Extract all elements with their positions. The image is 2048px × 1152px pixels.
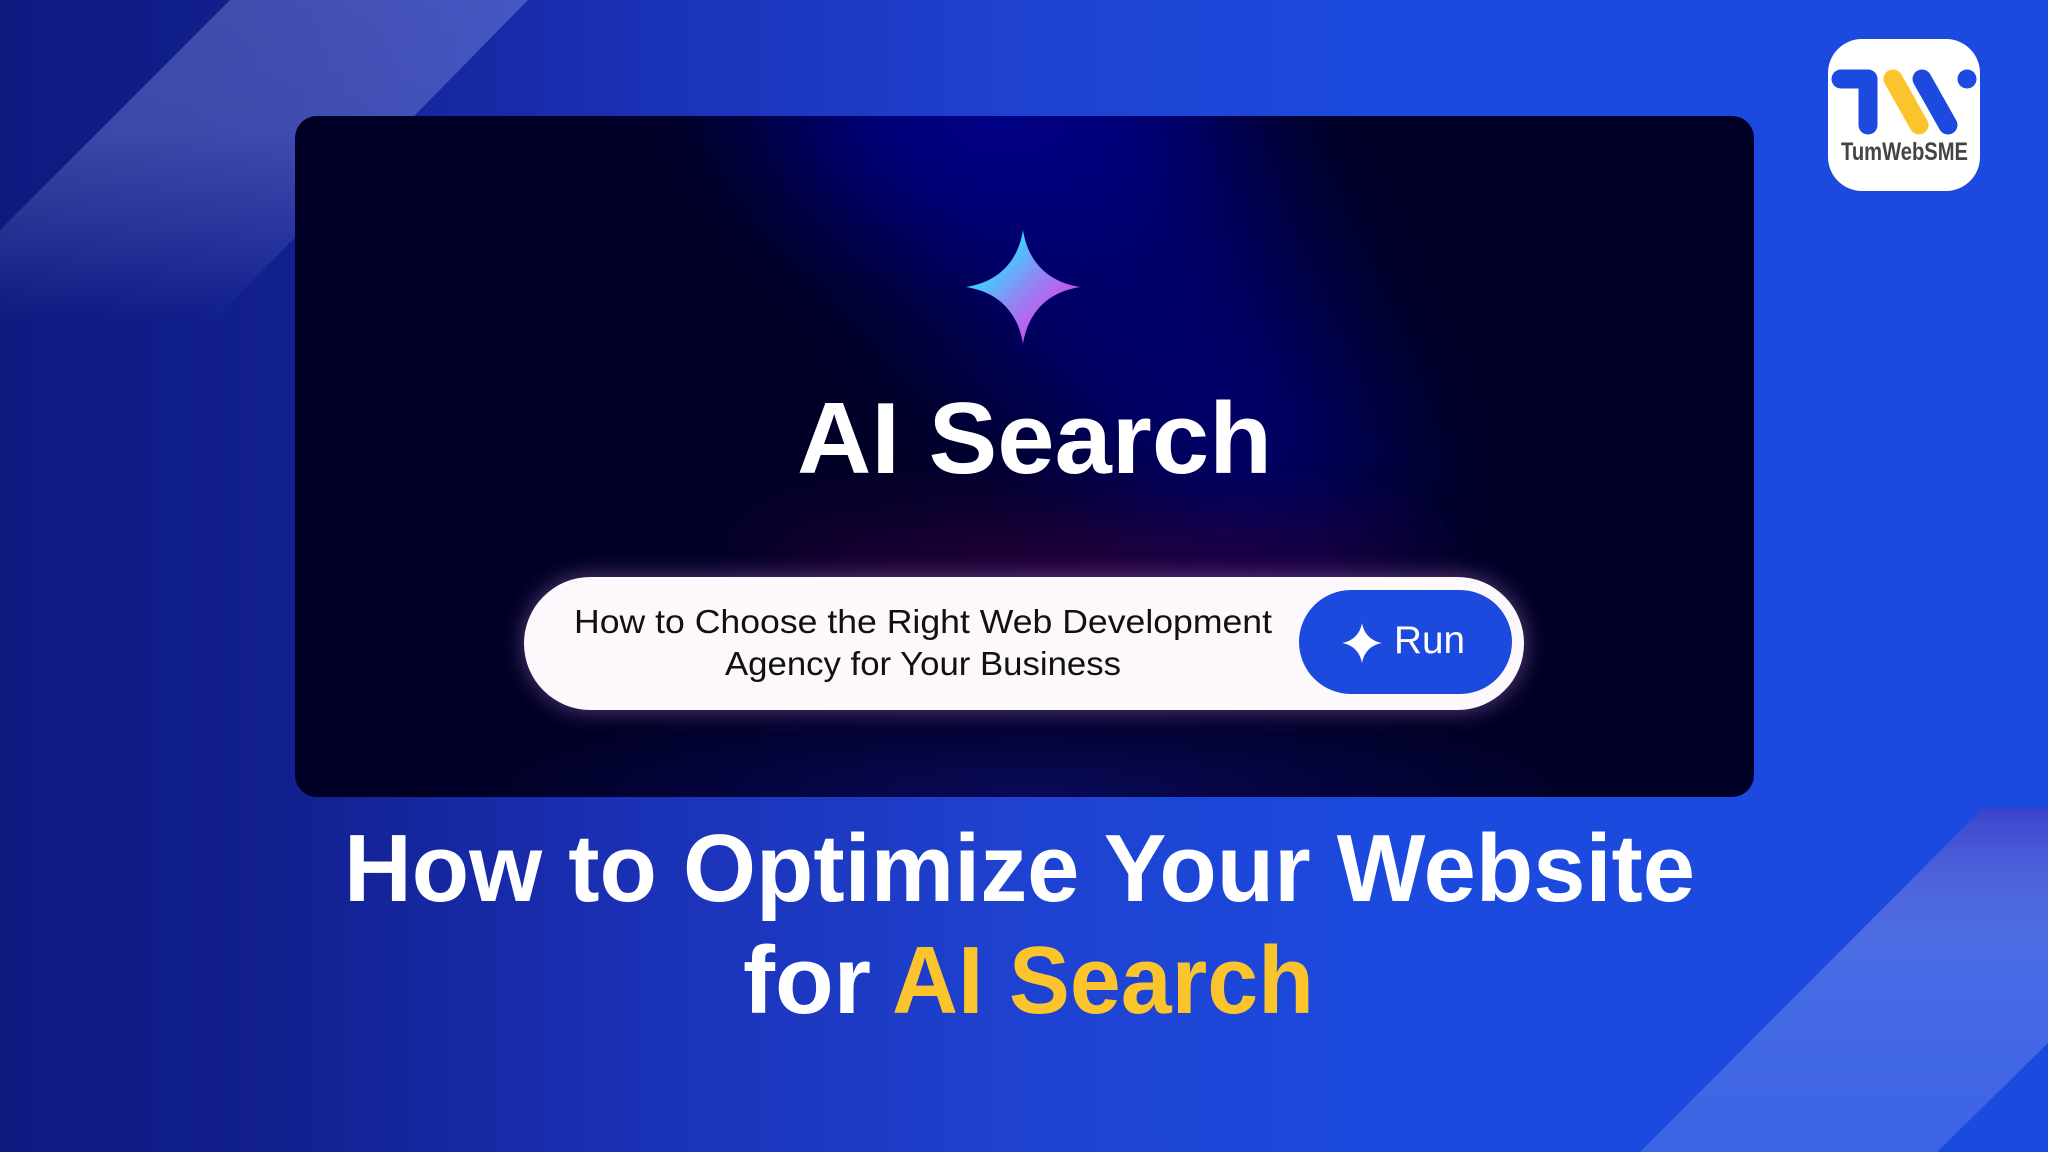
title: for	[743, 927, 871, 1034]
heading: AI Search: AI Search	[797, 383, 1272, 495]
title: How to Optimize Your Website	[344, 815, 1695, 922]
icon: white sparkle	[1342, 623, 1382, 663]
run button	[1299, 590, 1512, 694]
search query text: Agency for Your Business	[725, 645, 1121, 682]
logo: TumWebSME	[1828, 39, 1980, 191]
icon: gradient sparkle	[966, 230, 1080, 344]
button label: Run	[1394, 619, 1465, 662]
search bar	[522, 574, 1527, 713]
search query text: How to Choose the Right Web Development	[574, 603, 1272, 640]
panel: AI search card	[295, 116, 1754, 797]
title	[344, 815, 1695, 1034]
title: AI Search	[892, 927, 1314, 1034]
logo mark	[1841, 70, 1976, 125]
logo wordmark: TumWebSME	[1841, 138, 1968, 166]
search query text	[574, 603, 1272, 682]
decorative stripe: top left	[0, 0, 528, 320]
decorative stripe: bottom right	[1640, 808, 2048, 1152]
